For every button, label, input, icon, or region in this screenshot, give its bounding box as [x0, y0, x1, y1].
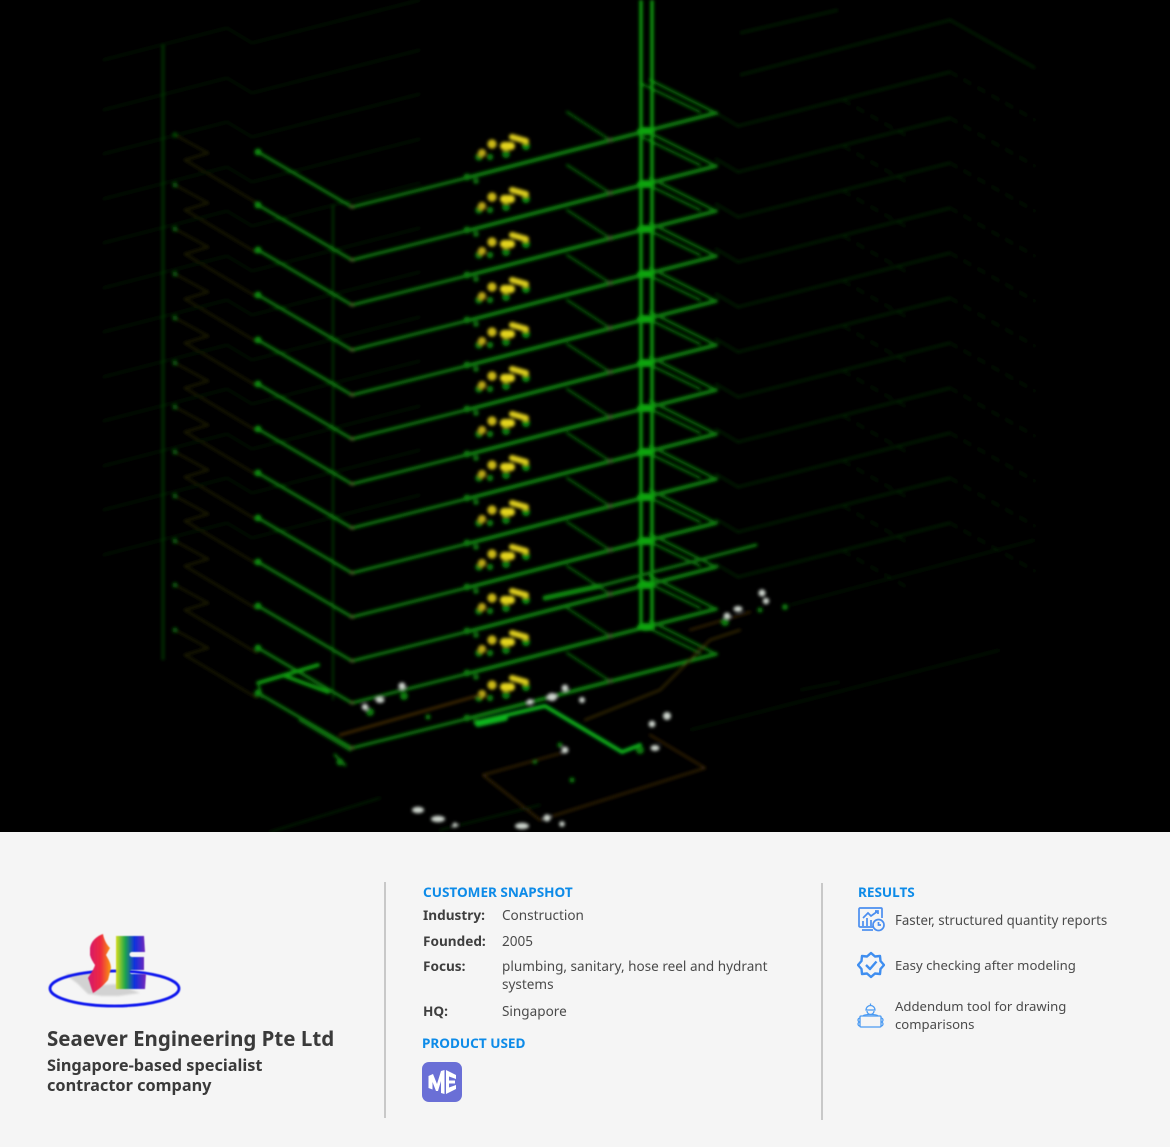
text: Faster, structured quantity reports [895, 911, 1107, 929]
row: HQ: Singapore [502, 1002, 567, 1020]
row: founded: 2005 [502, 932, 533, 950]
faint background floors, left [103, 0, 420, 700]
ground level pipework [258, 545, 756, 832]
icon: ME product logo [422, 1062, 462, 1102]
icon: chart with clock [858, 907, 885, 932]
icon: check badge [857, 952, 885, 978]
row: focus: Focus: [423, 956, 465, 975]
white fittings [362, 589, 769, 829]
divider: logo and snapshot [384, 882, 386, 1118]
floor piping levels [254, 80, 716, 750]
heading: results: RESULTS [858, 883, 915, 901]
row: focus: plumbing, sanitary, hose reel and hydrant [502, 957, 768, 975]
panel: customer snapshot [422, 883, 768, 1102]
result: checking [857, 952, 1076, 978]
row: industry: Industry: [423, 905, 485, 924]
company description: Singapore-based specialist [47, 1054, 262, 1076]
panel: company [47, 933, 334, 1096]
text: Addendum tool for drawing [895, 997, 1066, 1015]
row: focus [423, 956, 768, 993]
company description: contractor company [47, 1074, 211, 1096]
vertical risers [641, 0, 652, 625]
row: focus: systems [502, 975, 554, 993]
faint background floors, right [690, 10, 1035, 730]
text: comparisons [895, 1015, 974, 1033]
icon: worker with drawing [857, 1004, 884, 1028]
heading: customer snapshot: CUSTOMER SNAPSHOT [423, 883, 573, 901]
logo: Seaever Engineering [48, 933, 182, 1008]
row: industry [423, 905, 584, 924]
row: founded [423, 931, 533, 950]
company name: Seaever Engineering Pte Ltd [47, 1025, 334, 1053]
row: HQ [423, 1001, 567, 1020]
row: founded: Founded: [423, 931, 486, 950]
riser junction nodes [637, 127, 655, 631]
result: quantity reports [858, 907, 1107, 932]
company description [47, 1054, 262, 1096]
panel: results [857, 883, 1107, 1033]
result: addendum [857, 997, 1066, 1033]
divider: snapshot and results [821, 883, 822, 1120]
row: HQ: HQ: [423, 1001, 448, 1020]
row: industry: Construction [502, 906, 584, 924]
text [895, 997, 1066, 1033]
green fittings [336, 604, 788, 783]
heading: product used: PRODUCT USED [422, 1034, 525, 1052]
hero: isometric piping model render [0, 0, 1170, 832]
text: Easy checking after modeling [895, 956, 1076, 974]
